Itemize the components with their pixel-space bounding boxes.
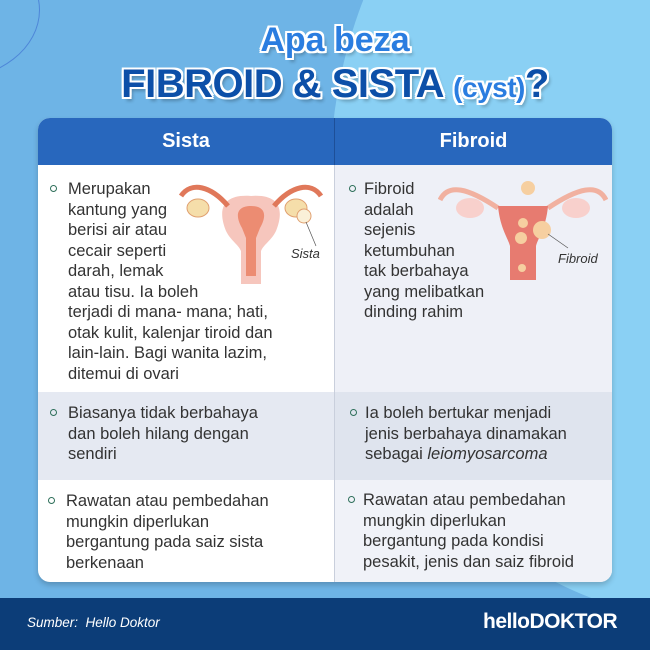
title [121,21,552,108]
text: sista row 3: Rawatan atau pembedahan [66,492,269,510]
background circle [330,0,650,620]
text: fibroid definition: yang melibatkan [364,282,484,300]
text: sista row 2: sendiri [68,445,117,463]
text: sista definition: atau tisu. Ia boleh [68,282,198,300]
text: fibroid row 3: Rawatan atau pembedahan [363,491,566,509]
text: sista row 2 [50,404,258,463]
icon: uterus with cyst [179,184,323,284]
text: sista definition: Merupakan [68,180,151,198]
icon: uterus with fibroid: Fibroid [558,251,599,266]
header: Fibroid: Fibroid [440,130,507,152]
header: Fibroid [335,118,612,165]
icon: uterus with cyst: Sista [291,246,320,261]
text: fibroid definition: sejenis [364,221,415,239]
text: fibroid row 3: mungkin diperlukan [363,512,506,530]
text: fibroid row 2: Ia boleh bertukar menjadi [365,404,551,422]
title: Apa beza [260,21,410,59]
text: sista row 2: dan boleh hilang dengan [68,424,249,442]
text: sista row 2: Biasanya tidak berbahaya [68,404,258,422]
text: fibroid definition: ketumbuhan [364,242,455,260]
title: FIBROID & SISTA (cyst)? [121,62,549,106]
text: fibroid row 3 [348,491,574,570]
text: fibroid row 3: pesakit, jenis dan saiz fibroid [363,552,574,570]
text: fibroid row 3: bergantung pada kondisi [363,532,544,550]
text: fibroid row 2: sebagai leiomyosarcoma [365,445,548,463]
logo: helloDOKTOR [483,610,617,633]
text: sista row 3: mungkin diperlukan [66,512,209,530]
text: sista definition: kantung yang [68,200,167,218]
text: sista definition: terjadi di mana- mana; hati, [68,303,268,321]
icon: uterus with fibroid [438,181,608,280]
text: fibroid row 2: jenis berbahaya dinamakan [365,424,567,442]
table [38,118,612,582]
text: fibroid definition: dinding rahim [364,303,463,321]
text: sista definition: otak kulit, kalenjar tiroid dan [68,324,273,342]
text: fibroid definition: adalah [364,200,414,218]
text: fibroid definition [349,180,484,321]
text: fibroid definition: Fibroid [364,180,414,198]
source text: Sumber: Hello Doktor [27,615,160,630]
text: sista definition: ditemui di ovari [68,364,179,382]
text: sista definition: darah, lemak [68,262,163,280]
text: fibroid row 2 [350,404,567,463]
text: fibroid definition: tak berbahaya [364,262,469,280]
text: sista definition: lain-lain. Bagi wanita lazim, [68,344,267,362]
text: sista row 3: berkenaan [66,554,144,572]
text: sista definition: cecair seperti [68,242,166,260]
text: sista row 3 [48,492,269,572]
text: sista definition [50,180,273,382]
text: sista row 3: bergantung pada saiz sista [66,533,263,551]
decorative outline circle [0,0,40,80]
header: Sista: Sista [162,130,210,152]
header: Sista [38,118,334,165]
text: sista definition: berisi air atau [68,221,167,239]
footer [0,598,650,650]
